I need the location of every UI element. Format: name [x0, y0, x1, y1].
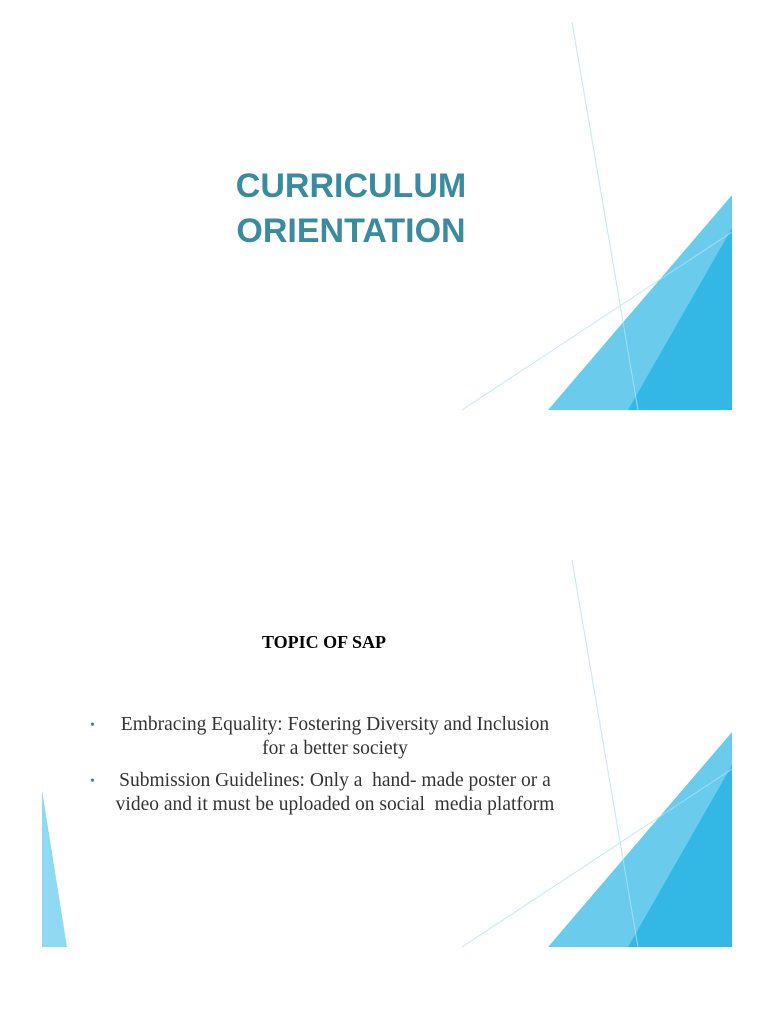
bullet 2: Submission Guidelines: Only a hand- made poster or a [119, 770, 551, 791]
title [236, 167, 466, 250]
bullet list [90, 714, 554, 815]
bullet 1 [90, 714, 549, 759]
bullet 1: for a better society [262, 738, 408, 759]
bullet 2 [90, 770, 554, 815]
bullet 1: Embracing Equality: Fostering Diversity and Inclusion [121, 714, 549, 735]
title: CURRICULUM [236, 167, 466, 205]
bullet 2: video and it must be uploaded on social media platform [116, 794, 554, 815]
text: • [90, 774, 95, 789]
text: • [90, 718, 95, 733]
title: ORIENTATION [236, 212, 466, 250]
heading: topic of sap: TOPIC OF SAP [262, 632, 386, 652]
